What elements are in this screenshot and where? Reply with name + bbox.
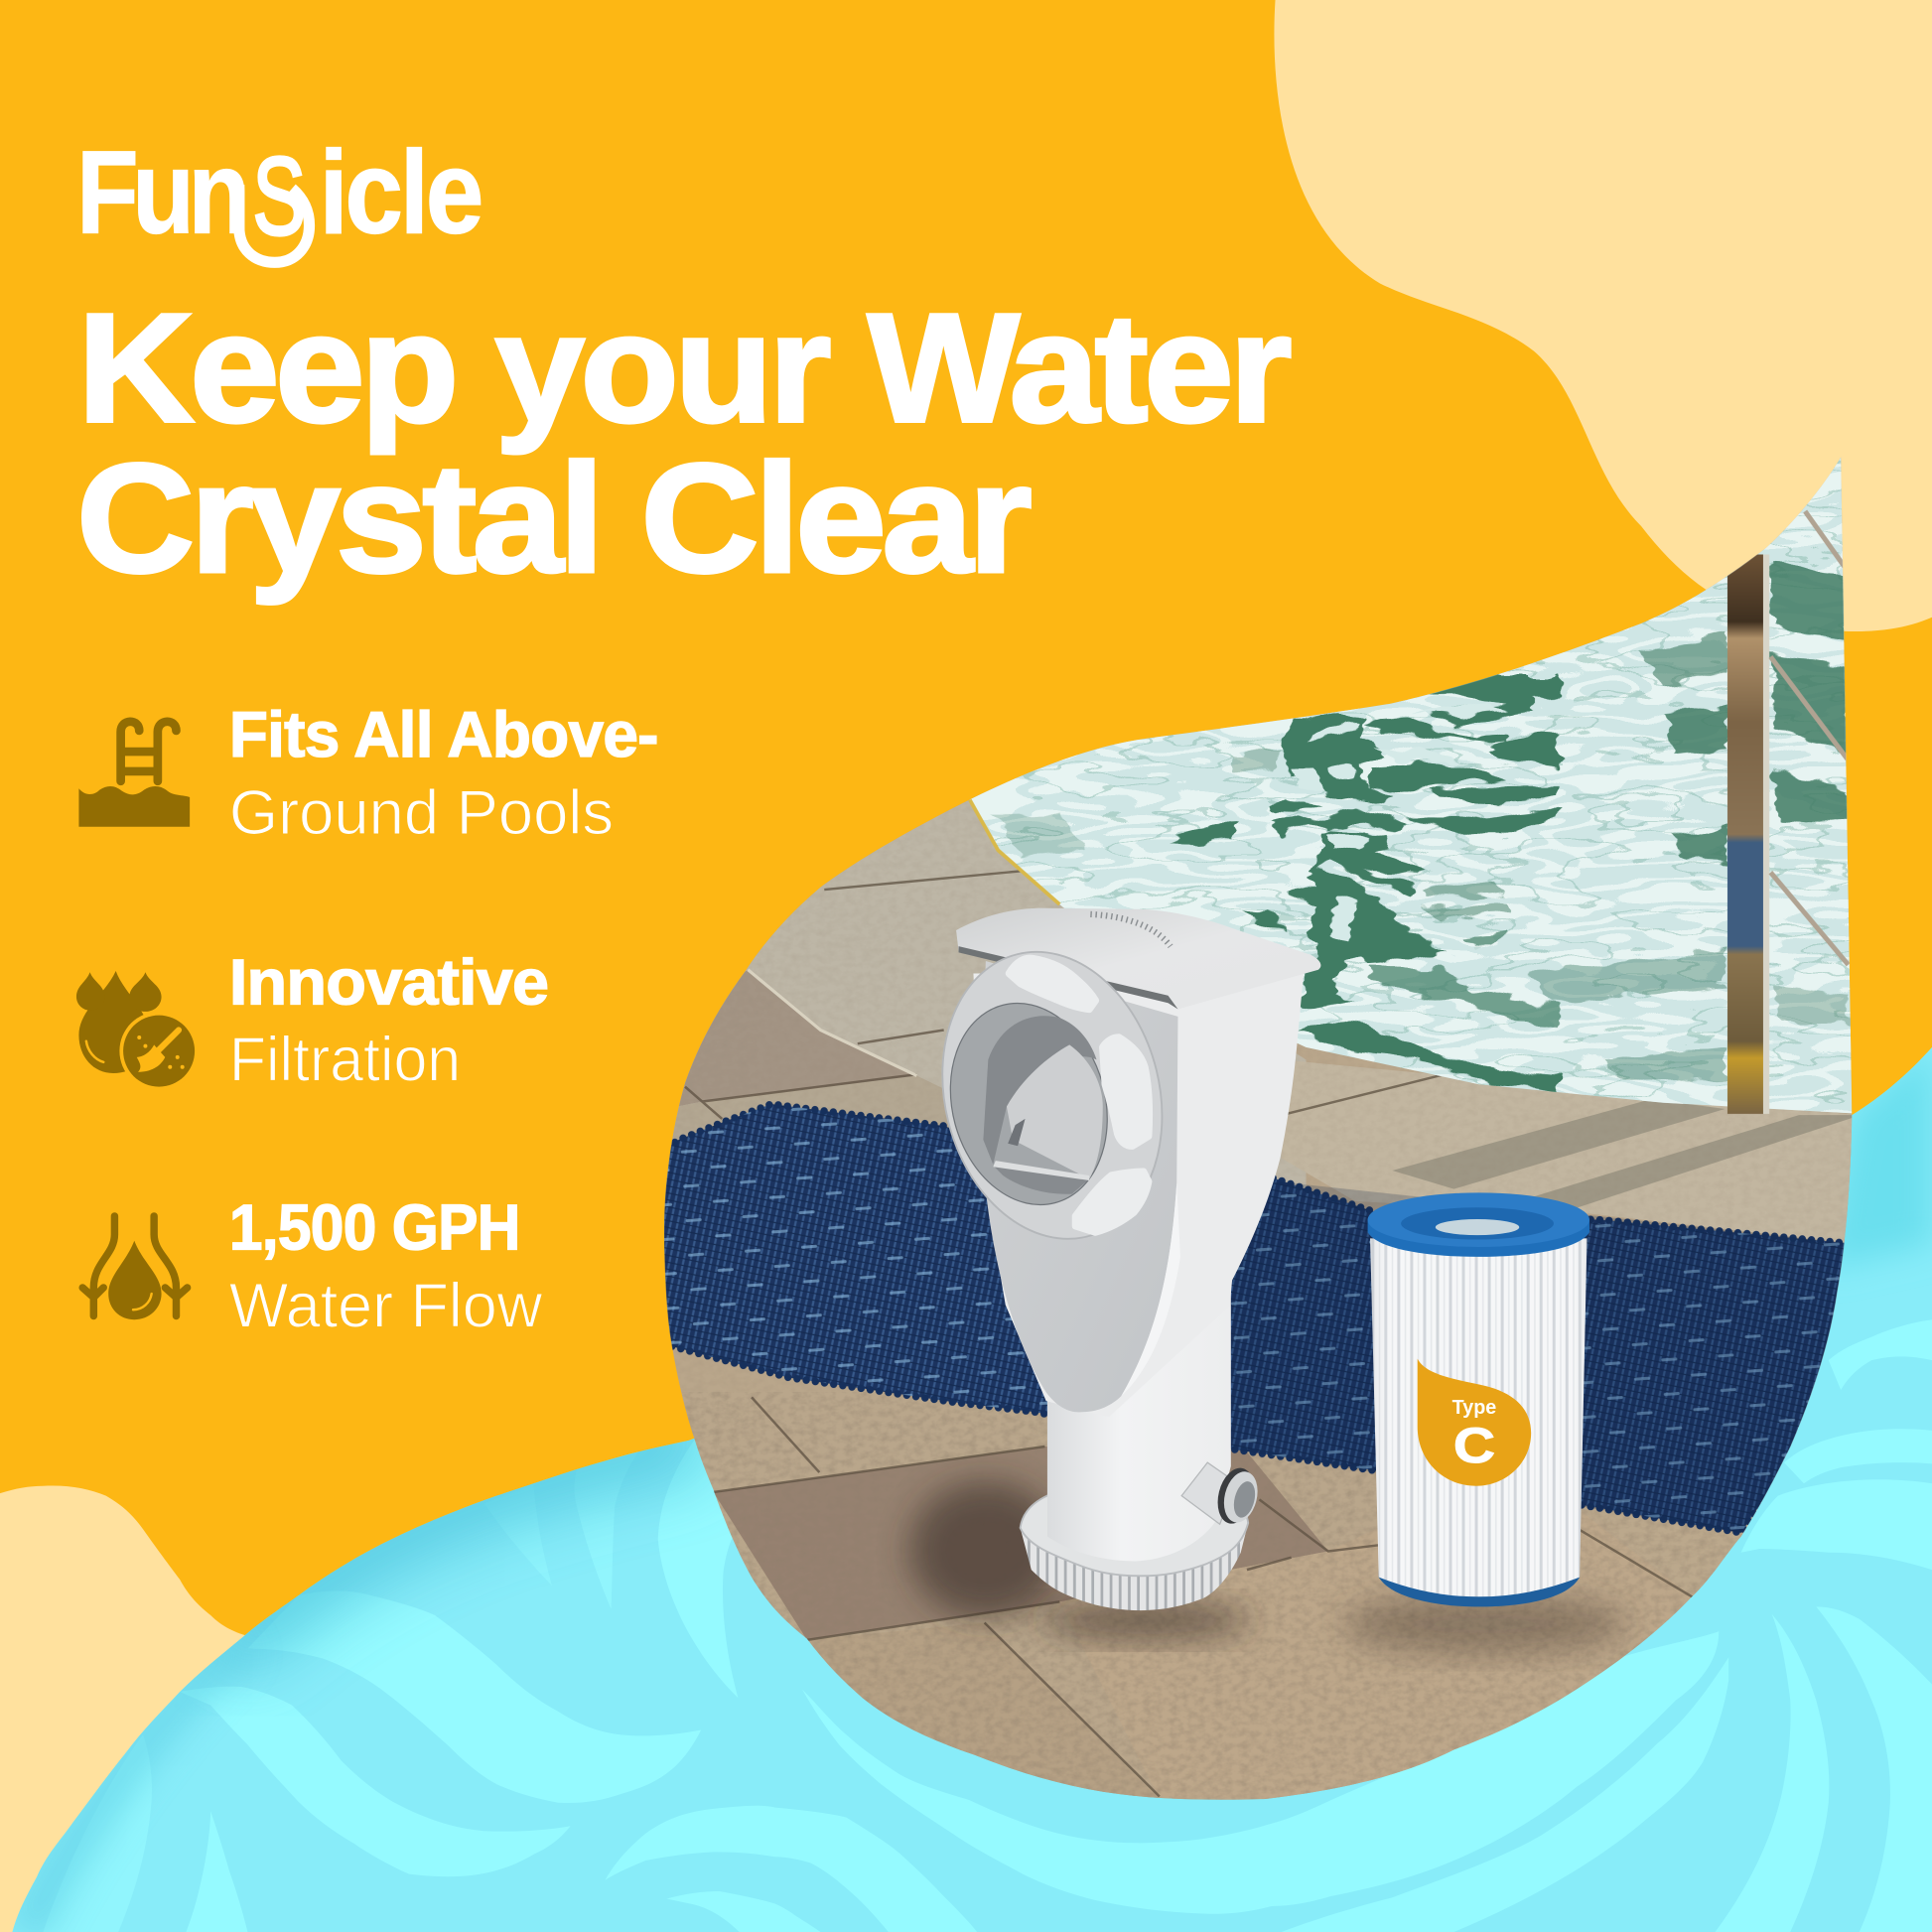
- brand logo: Fun: [76, 127, 244, 259]
- cartridge: Type C droplet label: Type: [1452, 1396, 1496, 1419]
- headline: Crystal Clear: [76, 432, 1031, 606]
- cartridge: bottom cap: [1379, 1555, 1580, 1606]
- cream blob: top right: [1274, 0, 1932, 631]
- pump: stem pipe: [1047, 1282, 1231, 1561]
- cartridge: Type C droplet label: C: [1453, 1418, 1495, 1473]
- pump: hose port: [1181, 1462, 1263, 1528]
- photo: ladder post and rails: [1727, 511, 1849, 1114]
- feature: fits all above-ground pools: [78, 699, 658, 848]
- headline: [76, 281, 1291, 606]
- feature text: [229, 1191, 542, 1341]
- icon: pool ladder and water: [78, 722, 190, 827]
- headline: Keep your Water: [77, 281, 1291, 455]
- feature text: [229, 946, 548, 1094]
- cartridge: Type C droplet label: [1418, 1359, 1531, 1486]
- brand logo: S: [252, 134, 306, 258]
- aqua water swirl background: [12, 1047, 1932, 1932]
- pump: housing: [973, 961, 1304, 1417]
- photo: deck: [653, 444, 1885, 1811]
- feature text: Filtration: [229, 1025, 461, 1094]
- product photo in teardrop frame: [653, 444, 1885, 1811]
- cartridge: blue top cap: [1368, 1192, 1589, 1257]
- replacement filter cartridge: [1361, 1192, 1595, 1614]
- icon: water drop with flow arrows: [82, 1216, 188, 1319]
- feature text: Fits All Above-: [229, 699, 658, 770]
- skimmer pump product: [913, 908, 1320, 1610]
- feature text: [229, 699, 658, 848]
- photo: woven blue mat: [653, 1097, 1866, 1540]
- feature text: Water Flow: [229, 1272, 542, 1341]
- feature: innovative filtration: [76, 946, 548, 1094]
- photo: cast shadows: [909, 1481, 1626, 1654]
- feature text: Ground Pools: [229, 778, 614, 848]
- icon: water drops and broom: [76, 971, 199, 1090]
- cream blob: bottom left: [0, 1485, 252, 1932]
- pump: hinged lid: [956, 908, 1320, 1009]
- feature text: 1,500 GPH: [229, 1191, 520, 1263]
- brand logo: icle: [319, 127, 481, 259]
- brand logo: [76, 127, 481, 262]
- pump: intake ring: [913, 928, 1191, 1263]
- cartridge: pleated body: [1370, 1238, 1587, 1596]
- feature text: Innovative: [229, 946, 548, 1018]
- photo: pool water: [936, 444, 1885, 1115]
- pump: ribbed base: [1021, 1482, 1248, 1610]
- feature: 1,500 GPH water flow: [82, 1191, 542, 1341]
